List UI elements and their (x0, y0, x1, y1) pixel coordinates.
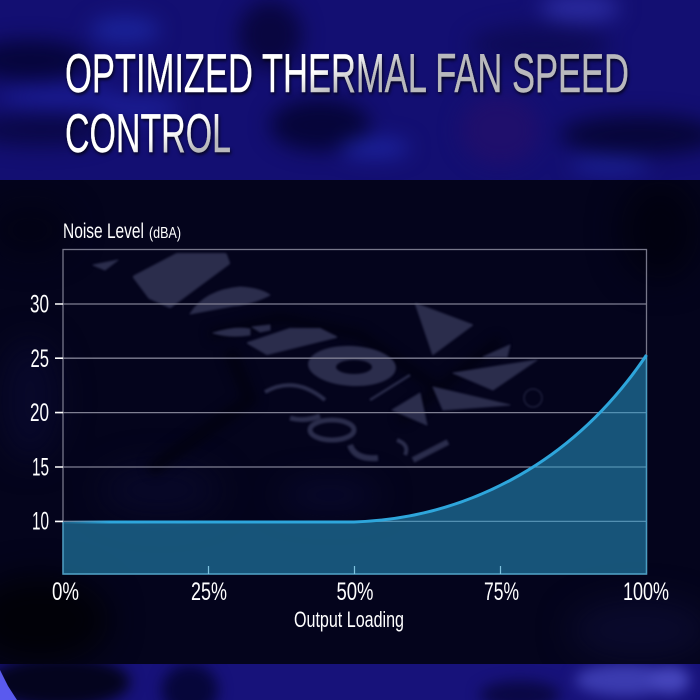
panel: dark chart background (0, 180, 700, 665)
panel: blue header background (0, 0, 700, 180)
noise curve (63, 355, 646, 522)
panel: blue footer band (0, 664, 700, 700)
gridlines (63, 250, 646, 574)
y axis title: (dBA) (149, 225, 181, 242)
area border (63, 355, 646, 574)
x axis labels: 0% (52, 578, 79, 606)
x ticks (208, 566, 500, 574)
y axis labels: 20 (30, 399, 49, 427)
y axis labels: 10 (32, 508, 49, 536)
x axis labels (52, 578, 669, 606)
x axis labels: 100% (623, 578, 669, 606)
x axis labels: 25% (191, 578, 227, 606)
x axis title: Output Loading (294, 607, 404, 632)
x axis labels: 50% (336, 578, 374, 606)
y axis title: Noise Level (63, 219, 144, 243)
y ticks (55, 304, 63, 521)
y axis labels: 15 (32, 454, 49, 482)
fan logo highlights (93, 255, 542, 460)
x axis labels: 75% (484, 578, 519, 606)
y axis labels: 25 (30, 345, 49, 373)
y axis labels (30, 290, 49, 536)
title (65, 42, 629, 164)
area fill (63, 355, 646, 574)
line chart (30, 250, 669, 632)
title: CONTROL (65, 102, 231, 164)
y axis labels: 30 (30, 290, 49, 318)
